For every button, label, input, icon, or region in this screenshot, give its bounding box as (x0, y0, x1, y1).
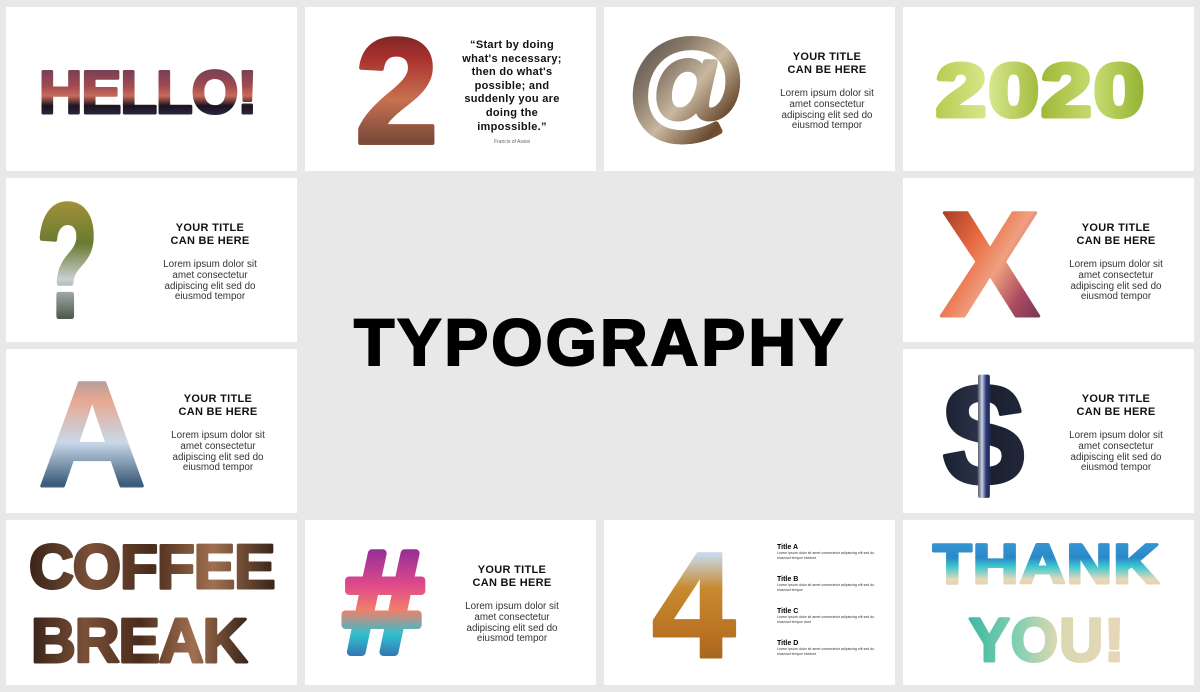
quote text: “Start by doing what's necessary; then do what's possible; and suddenly you are doing the impossible.” (462, 39, 562, 133)
text block: CAN BE HERE (178, 406, 258, 418)
big text: THANK YOU! (932, 532, 1160, 674)
item D (777, 640, 874, 656)
text block: YOUR TITLE (1082, 222, 1150, 234)
text block: YOUR TITLE (176, 222, 244, 234)
item C (777, 608, 874, 624)
text block: YOUR TITLE (184, 393, 252, 405)
text block (163, 222, 257, 302)
text block: Lorem ipsum dolor sit (780, 88, 874, 99)
text block: Lorem ipsum dolor sit (171, 430, 265, 441)
card: 2020 (903, 7, 1194, 171)
big text: COFFEE BREAK: COFFEE (29, 533, 274, 602)
item D: Title D (777, 640, 798, 647)
card: COFFEE BREAK (6, 520, 297, 685)
big text: 2020: 2020 (936, 50, 1147, 132)
item D: Lorem ipsum dolor sit amet consectetur adipiscing elit sed do eiusmod tempor incidunt (777, 647, 874, 656)
big text: THANK YOU!: THANK (933, 532, 1160, 595)
text block (171, 393, 265, 473)
item B (777, 576, 874, 592)
text block: adipiscing elit sed do (173, 452, 263, 463)
item A: Title A (777, 544, 798, 551)
text block: eiusmod tempor (792, 120, 862, 131)
text block: CAN BE HERE (170, 235, 250, 247)
text block (780, 51, 874, 131)
item C: Title C (777, 608, 798, 615)
card: ? (6, 178, 297, 342)
text block: CAN BE HERE (472, 577, 552, 589)
text block: adipiscing elit sed do (782, 110, 872, 121)
big text: 2: 2 (355, 7, 438, 171)
text block: amet consectetur (180, 441, 256, 452)
card: # (305, 520, 596, 685)
text block: YOUR TITLE (793, 51, 861, 63)
text block: CAN BE HERE (1076, 235, 1156, 247)
text block: YOUR TITLE (1082, 393, 1150, 405)
text block: Lorem ipsum dolor sit (163, 259, 257, 270)
text block: eiusmod tempor (1081, 462, 1151, 473)
item A (777, 544, 874, 560)
item B: Lorem ipsum dolor sit amet consectetur adipiscing elit sed do eiusmod tempor (777, 583, 874, 592)
text block: amet consectetur (789, 99, 865, 110)
big text: HELLO!: HELLO! (39, 59, 256, 126)
text block: adipiscing elit sed do (1071, 281, 1161, 292)
card: X (903, 178, 1194, 342)
attribution: Francis of Assisi (494, 139, 530, 145)
card: quote (305, 7, 596, 171)
card: @ (604, 7, 895, 171)
text block: amet consectetur (474, 612, 550, 623)
card: $ (903, 349, 1194, 513)
text block: eiusmod tempor (477, 633, 547, 644)
item B: Title B (777, 576, 798, 583)
text block: amet consectetur (1078, 441, 1154, 452)
text block (465, 564, 559, 644)
text block: eiusmod tempor (175, 291, 245, 302)
text block: CAN BE HERE (787, 64, 867, 76)
text block: amet consectetur (1078, 270, 1154, 281)
big text: COFFEE BREAK: BREAK (31, 607, 248, 676)
text block: adipiscing elit sed do (467, 623, 557, 634)
text block (1069, 222, 1163, 302)
card: A (6, 349, 297, 513)
big text: COFFEE BREAK (29, 533, 275, 676)
big text: #: # (343, 521, 424, 683)
text block: adipiscing elit sed do (1071, 452, 1161, 463)
text block: adipiscing elit sed do (165, 281, 255, 292)
text block: Lorem ipsum dolor sit (1069, 259, 1163, 270)
big text: @: @ (629, 17, 744, 149)
big text: 4: 4 (652, 521, 735, 685)
big text: THANK YOU!: YOU! (969, 606, 1126, 674)
text block: CAN BE HERE (1076, 406, 1156, 418)
text block (1069, 393, 1163, 473)
title: TYPOGRAPHY: TYPOGRAPHY (354, 305, 846, 379)
card: THANK YOU (903, 520, 1194, 685)
text block: eiusmod tempor (1081, 291, 1151, 302)
big text: A: A (38, 350, 146, 513)
text block: Lorem ipsum dolor sit (465, 601, 559, 612)
text block: YOUR TITLE (478, 564, 546, 576)
item C: Lorem ipsum dolor sit amet consectetur adipiscing elit sed do eiusmod tempor dunt (777, 615, 874, 624)
item A: Lorem ipsum dolor sit amet consectetur adipiscing elit sed do eiusmod tempor incidunt (777, 551, 874, 560)
text block: amet consectetur (172, 270, 248, 281)
card: 4 with list (604, 520, 895, 685)
big text: $: $ (943, 353, 1024, 513)
list: titles (777, 544, 874, 656)
card: HELLO (6, 7, 297, 171)
text block: Lorem ipsum dolor sit (1069, 430, 1163, 441)
text block: eiusmod tempor (183, 462, 253, 473)
